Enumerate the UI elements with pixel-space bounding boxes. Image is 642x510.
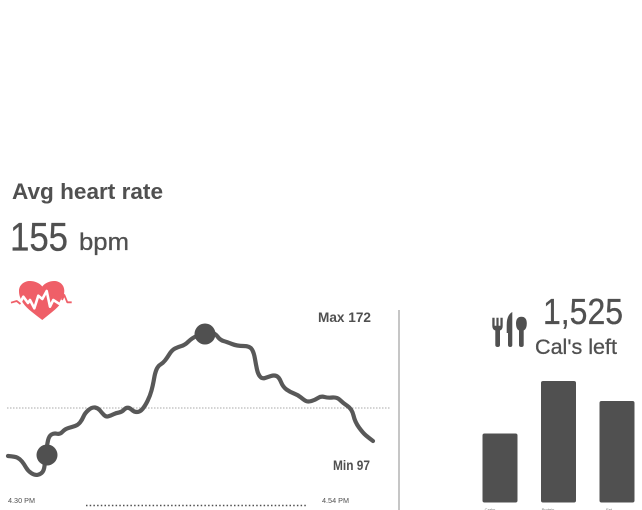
stat: 155 bpm: bpm <box>79 229 129 256</box>
marker: low point <box>36 444 58 466</box>
icon: cutlery <box>492 312 527 347</box>
bar: fat <box>600 401 634 502</box>
bar chart: macros <box>482 381 634 510</box>
stat: calories left: Cal's left <box>535 336 617 359</box>
bar labels <box>485 507 613 510</box>
bar: carbs <box>482 434 518 502</box>
label: min: Min 97 <box>333 457 370 473</box>
stat: 155 bpm <box>10 216 129 260</box>
bar: protein <box>541 381 576 502</box>
label: max: Max 172 <box>318 309 371 325</box>
heart rate curve <box>8 332 373 475</box>
time axis <box>8 498 349 506</box>
spoon <box>516 317 527 347</box>
fork <box>492 318 503 347</box>
stat: 155 bpm: 155 <box>10 216 68 260</box>
stat: calories left <box>535 291 623 359</box>
title: avg heart rate: Avg heart rate <box>12 179 163 204</box>
icon: heart with pulse <box>11 281 72 320</box>
knife <box>507 312 512 347</box>
stat: calories left: 1,525 <box>543 291 623 332</box>
label: start time: 4.30 PM <box>8 498 35 505</box>
chart: heart rate line <box>7 324 391 475</box>
label: end time: 4.54 PM <box>322 498 349 505</box>
marker: peak point <box>194 324 216 344</box>
